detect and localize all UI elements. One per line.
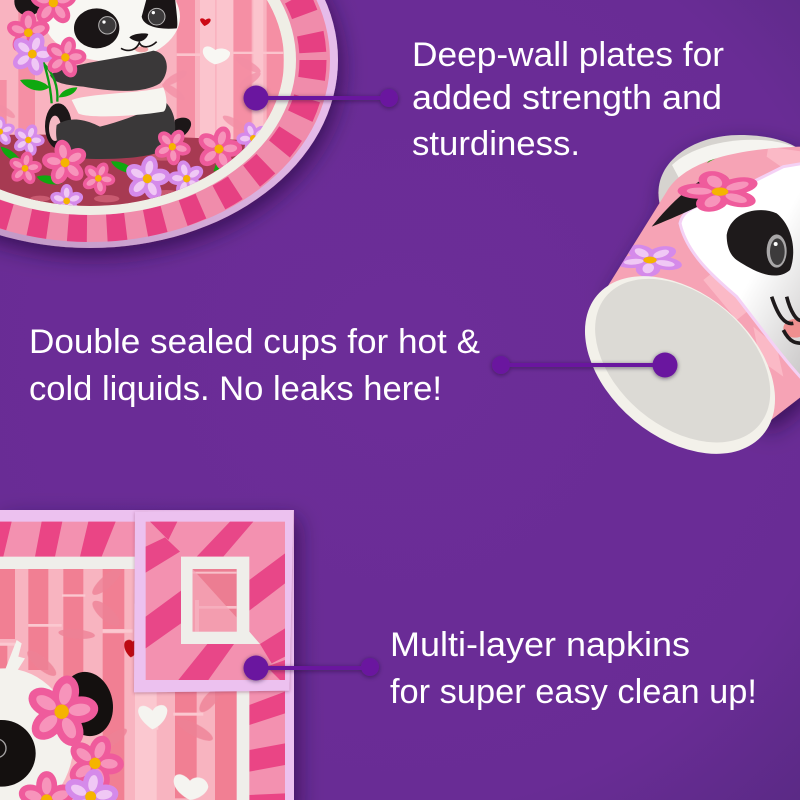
cup rim and body	[603, 135, 800, 423]
cup pointer	[492, 352, 678, 378]
left eye	[74, 8, 119, 48]
panda right ear	[142, 0, 177, 29]
panda tail and foot	[45, 103, 191, 149]
white hearts	[138, 705, 208, 800]
napkin caption	[390, 626, 757, 711]
flap white square	[181, 557, 260, 644]
cup eye patch	[727, 210, 793, 276]
napkin base	[0, 510, 294, 800]
panda belly	[72, 87, 166, 116]
flap inner picture	[192, 569, 237, 632]
plate rim	[0, 0, 338, 248]
plate illustration	[0, 0, 338, 248]
napkin panda ear	[72, 672, 113, 736]
plate pointer	[244, 86, 398, 110]
callout: napkin	[244, 626, 757, 711]
napkin illustration	[0, 510, 294, 800]
cup illustration	[585, 130, 800, 454]
plate caption: sturdiness.	[412, 125, 580, 163]
right eye	[148, 8, 165, 25]
flower on ear	[678, 171, 758, 212]
flap stripes	[146, 522, 285, 680]
napkin stripe border	[0, 522, 285, 800]
plate caption: Deep-wall plates for	[412, 36, 724, 74]
cup mouth	[772, 297, 800, 343]
cup pattern	[703, 147, 800, 377]
napkin eye patch	[0, 720, 36, 787]
folded flap	[134, 510, 293, 692]
hearts	[200, 18, 230, 64]
napkin flowers	[18, 676, 124, 800]
cheek	[135, 46, 148, 52]
plate caption: added strength and	[412, 79, 722, 117]
eye ring	[0, 739, 6, 758]
plate artwork	[0, 0, 284, 206]
flowers	[0, 0, 276, 218]
panda face	[680, 163, 800, 380]
napkin pointer	[244, 656, 379, 680]
panda ear	[652, 173, 730, 227]
white frame	[0, 557, 249, 800]
bamboo background	[0, 0, 283, 140]
cup base	[551, 240, 800, 490]
red heart	[124, 640, 138, 657]
panda body	[56, 102, 175, 159]
callout: plate	[244, 36, 724, 163]
napkin panda head	[0, 640, 73, 800]
lilac flower	[620, 244, 682, 276]
plate caption	[412, 36, 724, 163]
napkin caption: for super easy clean up!	[390, 673, 757, 711]
cup eye	[767, 234, 787, 268]
cup caption: Double sealed cups for hot &	[29, 323, 480, 361]
stems and leaves	[0, 62, 221, 184]
nose and mouth	[121, 33, 157, 50]
panda head	[43, 0, 180, 62]
panda arm	[50, 51, 167, 91]
green leaf	[706, 158, 717, 164]
cup caption: cold liquids. No leaks here!	[29, 370, 442, 408]
napkin caption: Multi-layer napkins	[390, 626, 690, 664]
ground	[0, 134, 252, 206]
napkin bamboo picture	[0, 565, 237, 800]
panda foot pad	[49, 116, 61, 141]
cup caption	[29, 323, 480, 408]
callout: cup	[29, 323, 678, 408]
panda ear	[14, 0, 40, 14]
